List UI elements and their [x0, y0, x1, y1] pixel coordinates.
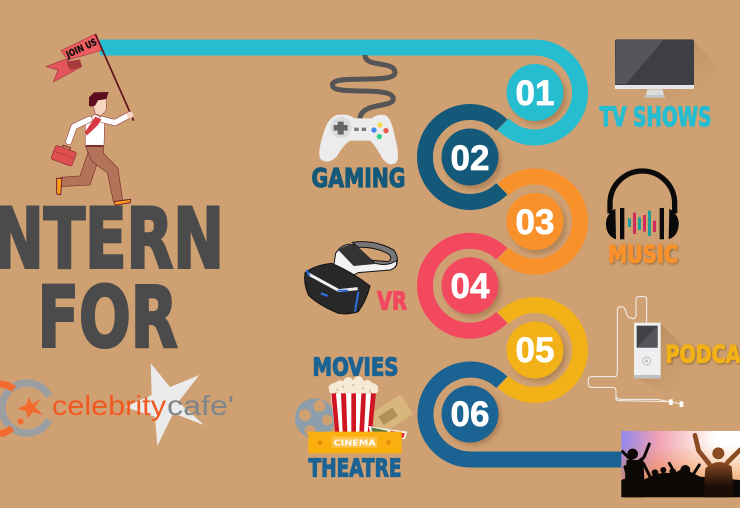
- title line two: FOR: [38, 268, 178, 366]
- controller cable: [332, 55, 395, 118]
- logo mark star: [17, 397, 43, 425]
- ring 01 with top line: [100, 47, 580, 137]
- step 06: 06: [451, 395, 489, 434]
- cinema label: CINEMA: [334, 438, 377, 447]
- flag tail: [46, 59, 82, 82]
- briefcase: [51, 143, 77, 166]
- flag banner: [61, 34, 103, 60]
- tie: [85, 117, 101, 136]
- ring 05: [503, 305, 580, 395]
- film reel: [295, 398, 335, 438]
- crowd silhouettes: [621, 449, 740, 497]
- vr band: [352, 242, 397, 270]
- label: movies: MOVIES: [312, 352, 398, 382]
- front shoe: [114, 199, 131, 205]
- flag label: JOIN US: [64, 37, 99, 61]
- step 04: 04: [451, 267, 490, 306]
- icon: vr headset: [305, 242, 397, 314]
- step 02: [442, 128, 502, 190]
- step 03: [506, 193, 566, 254]
- back shoe: [57, 178, 62, 195]
- step 02: 02: [451, 139, 489, 178]
- title line one: NTERN: [0, 190, 224, 288]
- logo: celebrity cafe: cafe': [167, 390, 234, 421]
- icon: movies and cinema: [295, 376, 413, 453]
- step 04: [442, 257, 502, 318]
- flag pole: [95, 34, 134, 121]
- logo: celebrity cafe: [0, 363, 234, 446]
- logo star: [125, 363, 204, 446]
- title: [0, 190, 224, 366]
- 3d glasses: [368, 426, 407, 439]
- step 01: 01: [516, 74, 554, 113]
- vr visor: [305, 263, 370, 314]
- cinema strip: [308, 432, 402, 453]
- icon: game controller: [319, 55, 398, 164]
- ticket: [368, 394, 413, 435]
- popcorn: [329, 376, 378, 395]
- icon: tv: [615, 39, 722, 102]
- arm to flag: [102, 115, 129, 123]
- step 05: 05: [516, 331, 554, 370]
- hair: [89, 92, 109, 107]
- ring 02: [425, 112, 502, 202]
- shirt: [85, 114, 105, 145]
- timeline rings: [100, 47, 622, 459]
- step 06: [442, 386, 502, 446]
- label: vr: VR: [377, 286, 407, 316]
- back leg: [61, 151, 100, 187]
- step 01: [506, 64, 566, 124]
- logo wordmark: celebrity: [52, 390, 166, 421]
- head: [92, 99, 107, 116]
- foreground figure: [703, 462, 734, 497]
- label: gaming: GAMING: [312, 164, 406, 194]
- ring 03: [503, 177, 580, 266]
- label: music: MUSIC: [608, 240, 678, 268]
- running man with join us flag: [46, 34, 134, 205]
- photo: concert crowd: [621, 431, 740, 497]
- step 03: 03: [516, 203, 554, 242]
- icon: media player: [588, 297, 697, 407]
- icon: headphones: [606, 171, 679, 239]
- label: theatre: THEATRE: [308, 454, 402, 482]
- front leg: [86, 147, 123, 201]
- vr strap: [332, 244, 397, 279]
- bucket: [331, 393, 376, 433]
- step 05: [506, 322, 566, 382]
- ring 04: [425, 241, 502, 331]
- logo rings: [2, 383, 49, 433]
- controller body: [319, 115, 398, 164]
- belt: [86, 145, 104, 147]
- arm to case: [69, 119, 89, 142]
- ring 06 with bottom line: [425, 370, 622, 460]
